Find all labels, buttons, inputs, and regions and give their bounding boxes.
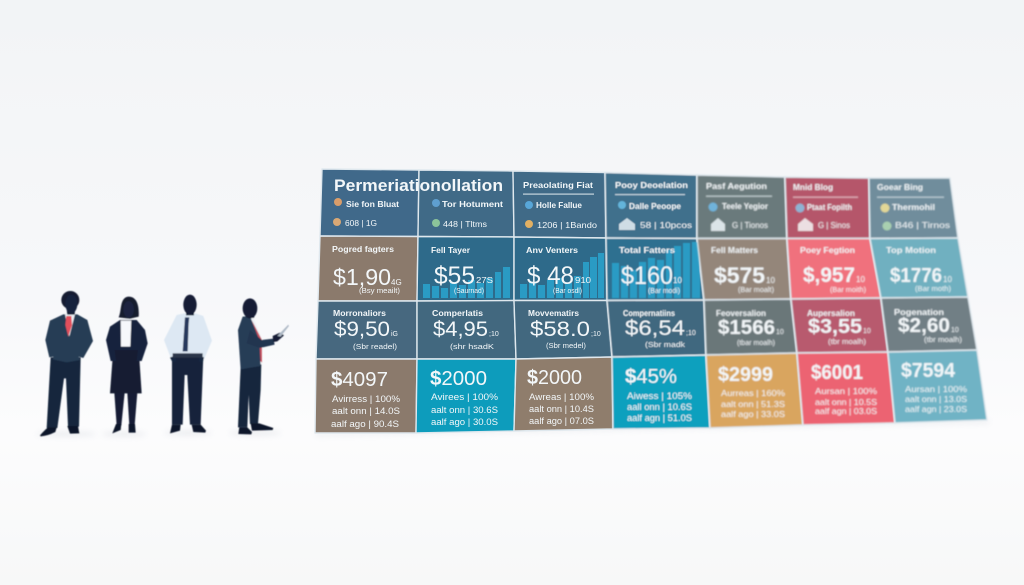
cell: pogred fagters: (Bsy meailt) [359, 288, 400, 295]
cell: fell matters: 10 [766, 276, 775, 285]
cell: $7594 light blue [888, 350, 987, 423]
cell: fell matters: (Bar moalt) [738, 287, 774, 294]
cell: fell tayer with bar chart: Fell Tayer [431, 246, 470, 255]
cell: top motion: Top Motion [886, 246, 936, 255]
cell: total fatters with bar chart [606, 238, 704, 300]
cell: anv venters with bar chart: (Bar osdl) [553, 288, 582, 295]
cell: $45% teal: $45% [625, 366, 677, 388]
cell: compernatiins [607, 300, 706, 357]
data table [315, 169, 987, 433]
cell: anv venters with bar chart: 910 [575, 275, 591, 285]
cell: aupersalion [791, 298, 888, 353]
cell: header 5 [697, 175, 787, 238]
cell: poey fegtion: (Bar moith) [830, 287, 866, 294]
cell: header 7: B46 | Tirnos [895, 221, 950, 230]
cell: poey fegtion: $,957 [803, 264, 855, 287]
cell: movvematirs: Movvematirs [528, 309, 580, 318]
cell: $4097: aalt onn | 14.0S [332, 406, 400, 416]
cell: top motion: $1776 [890, 265, 942, 287]
cell: $2000 teal: Avirees | 100% [431, 392, 498, 402]
cell: morronaliors: $9,50 [334, 318, 390, 341]
column 5 [697, 175, 803, 428]
cell: fell tayer with bar chart: 27S [476, 275, 493, 285]
cell: header 3: Holle Fallue [536, 201, 583, 210]
bar chart [612, 242, 700, 298]
cell: header 3 [513, 171, 606, 238]
cell: fell tayer with bar chart: (Saurnad) [454, 288, 484, 295]
cell: comperlatis: $4,95 [433, 318, 488, 341]
cell: morronaliors: iG [391, 331, 398, 338]
cell: header 2: 448 | Tltms [443, 219, 487, 229]
cell: comperlatis: (shr hsadK [450, 344, 494, 351]
cell: pogenation: 10 [951, 327, 959, 334]
cell: top motion: 10 [943, 275, 952, 284]
cell: header 4: Dalle Peoope [629, 202, 682, 211]
cell: header 7: Goear Bing [877, 182, 923, 192]
cell: $6001 red: aalt onn | 10.5S [815, 397, 877, 407]
cell: feoversalion: 10 [776, 329, 784, 336]
cell: pogred fagters: 4G [391, 278, 402, 287]
cell: $2999 amber: $2999 [718, 364, 773, 386]
cell: $6001 red: Aursan | 100% [815, 386, 877, 396]
cell: aupersalion: (tbr moalh) [828, 339, 866, 346]
cell: $2000 teal: aalf ago | 30.0S [431, 417, 498, 427]
cell: $2999 amber [706, 353, 803, 428]
cell: movvematirs: $58.0 [530, 318, 590, 341]
cell: morronaliors: (Sbr readel) [353, 344, 397, 351]
icon: building [798, 218, 813, 231]
cell: fell matters: $575 [714, 263, 765, 288]
cell: header 3: Preaolating Fiat [523, 180, 593, 190]
cell: compernatiins: (Sbr madk [645, 342, 686, 349]
figure 3: man in white shirt and dark tie [164, 295, 212, 433]
cell: pogred fagters: Pogred fagters [332, 245, 395, 254]
cell: feoversalion: $1566 [718, 317, 775, 339]
cell: total fatters with bar chart: 10 [673, 276, 682, 285]
cell: anv venters with bar chart: Anv Venters [526, 246, 579, 255]
cell: fell tayer with bar chart [417, 236, 514, 301]
cell: $2999 amber: aalt onn | 51.3S [721, 399, 785, 409]
cell: $2000 brown [514, 357, 613, 431]
bar chart [423, 267, 510, 298]
cell: $45% teal: Aiwess | 105% [627, 391, 692, 401]
column 7 [869, 178, 987, 423]
cell: header 2: Tor Hotument [442, 199, 503, 209]
column 4 [605, 172, 710, 429]
cell: top motion: (Bar moth) [915, 286, 951, 293]
cell: header 4: 58 | 10pcos [640, 220, 692, 230]
cell: $4097: aalf ago | 90.4S [331, 419, 399, 429]
cell: pogenation: (tbr moalh) [924, 337, 962, 344]
icon: building [619, 218, 635, 230]
cell: $6001 red: aalf agn | 03.0S [815, 406, 877, 416]
cell: header 5: Pasf Aegution [706, 181, 767, 191]
cell: $6001 red [797, 352, 895, 425]
cell: total fatters with bar chart: Total Fatters [619, 246, 676, 255]
cell: poey fegtion [787, 238, 881, 299]
cell: poey fegtion: Poey Fegtion [800, 246, 855, 255]
cell: feoversalion: (tbar moalh) [737, 340, 775, 347]
figures: four business people [40, 291, 289, 436]
icon: building [711, 218, 725, 231]
cell: $2999 amber: aalf ago | 33.0S [721, 409, 785, 419]
figure 1: man in suit with red tie [40, 291, 93, 436]
cell: header 6 [785, 177, 870, 238]
cell: compernatiins: $6,54 [625, 317, 685, 340]
cell: header 6: G | Sinos [818, 221, 850, 230]
cell: $45% teal: aalf agn | 51.0S [627, 413, 692, 423]
cell: comperlatis: ;10 [489, 331, 499, 338]
cell: pogred fagters [318, 236, 418, 301]
cell: $7594 light blue: aalt onn | 13.0S [905, 394, 967, 404]
cell: header 2 [418, 170, 514, 237]
cell: fell tayer with bar chart: $55 [434, 262, 475, 290]
cell: feoversalion [704, 299, 797, 355]
cell: aupersalion: $3,55 [808, 316, 862, 338]
cell: aupersalion: Aupersalion [807, 309, 855, 318]
cell: header 3: 1206 | 1Bando [537, 220, 597, 230]
cell: total fatters with bar chart: (Bar modi) [648, 288, 680, 295]
cell: pogenation [881, 297, 977, 352]
cell: pogenation: $2,60 [898, 315, 950, 337]
cell: $2999 amber: Aurreas | 160% [721, 388, 785, 398]
cell: morronaliors [316, 301, 417, 359]
cell: $7594 light blue: Aursan | 100% [905, 384, 967, 394]
cell: $2000 teal: aalt onn | 30.6S [431, 405, 498, 415]
cell: $45% teal: aall onn | 10.6S [627, 402, 692, 412]
cell: comperlatis: Comperlatis [432, 309, 484, 318]
cell: $4097: Avirress | 100% [332, 394, 400, 404]
cell: $2000 brown: $2000 [527, 367, 582, 389]
cell: pogenation: Pogenation [894, 308, 944, 317]
cell: top motion [870, 238, 968, 298]
cell: pogred fagters: $1,90 [333, 264, 391, 290]
cell: movvematirs: (Sbr medel) [546, 343, 586, 350]
cell: header 6: Mnid Blog [793, 182, 833, 192]
cell: comperlatis [417, 300, 516, 359]
column 1 [315, 169, 419, 433]
cell: aupersalion: 10 [863, 328, 871, 335]
cell: compernatiins: Compernatiins [623, 309, 676, 318]
cell: $4097: $4097 [331, 369, 388, 391]
title: spans first two header cells: Permeriationollation [334, 177, 503, 195]
cell: header 4 [605, 172, 697, 238]
cell: $7594 light blue: $7594 [901, 360, 956, 382]
column 3 [513, 171, 613, 431]
cell: header 5: Teele Yegior [722, 202, 768, 211]
cell: $2000 brown: aalf ago | 07.0S [529, 416, 594, 426]
column 2 [416, 170, 516, 433]
column 6 [785, 177, 895, 425]
cell: $4097 [315, 359, 417, 433]
cell: anv venters with bar chart [514, 237, 607, 300]
cell: $45% teal [612, 355, 710, 429]
floor shadows [36, 420, 990, 436]
cell: header 1 with merged title: Sie fon Bluat [346, 199, 399, 209]
bar chart [520, 253, 604, 298]
cell: fell matters [697, 238, 791, 300]
cell: header 6: Ptaat Fopilth [807, 203, 852, 212]
cell: poey fegtion: 10 [856, 275, 865, 284]
cell: feoversalion: Feoversalion [716, 309, 766, 318]
cell: movvematirs [514, 300, 612, 359]
cell: $7594 light blue: aalf agn | 23.0S [905, 404, 967, 414]
figure 4: man presenting with tablet [238, 298, 289, 434]
cell: total fatters with bar chart: $160 [621, 262, 673, 290]
cell: header 1 with merged title [320, 169, 419, 236]
cell: compernatiins: ;10 [686, 330, 696, 337]
cell: header 7: Thermohil [892, 203, 935, 212]
cell: $2000 teal [416, 359, 516, 433]
cell: $2000 brown: aalt onn | 10.4S [529, 404, 594, 414]
figure 2: woman in jacket and skirt [106, 297, 148, 433]
cell: header 1 with merged title: 608 | 1G [345, 218, 377, 228]
cell: header 5: G | Tionos [732, 221, 768, 230]
cell: fell matters: Fell Matters [711, 246, 759, 255]
cell: anv venters with bar chart: $ 48 [527, 262, 574, 290]
cell: morronaliors: Morronaliors [333, 309, 387, 318]
cell: movvematirs: ;10 [591, 331, 601, 338]
cell: $2000 teal: $2000 [430, 368, 487, 390]
cell: header 7 [869, 178, 958, 238]
cell: $2000 brown: Awreas | 100% [529, 392, 594, 402]
cell: header 4: Pooy Deoelation [615, 180, 688, 190]
cell: $6001 red: $6001 [811, 362, 863, 384]
